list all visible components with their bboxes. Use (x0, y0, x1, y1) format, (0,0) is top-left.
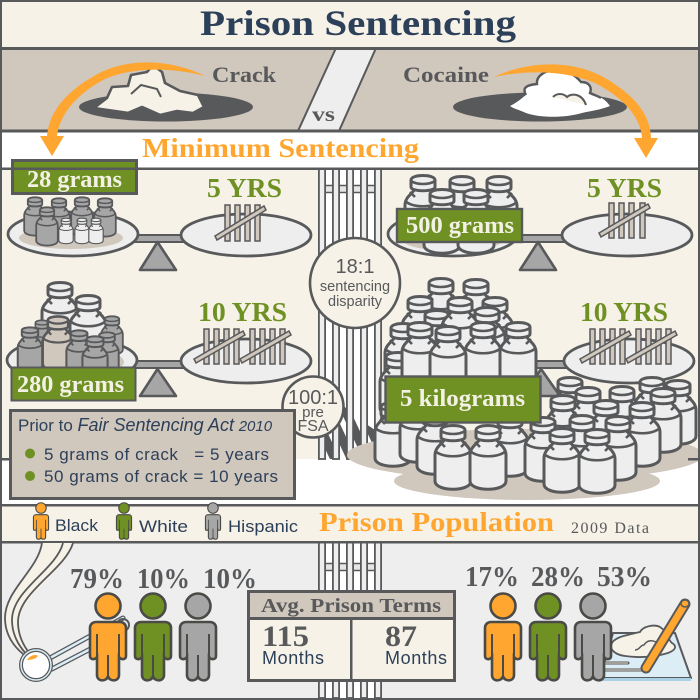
percent: 10: 10% (137, 564, 190, 595)
panel: average prison terms (248, 592, 454, 680)
legend: hispanic: Hispanic (228, 517, 299, 536)
header: Avg. Prison Terms (261, 595, 441, 617)
heading: prison population: Prison Population (319, 507, 554, 537)
label: 500 grams (397, 209, 522, 242)
crack label: Crack (212, 62, 277, 87)
cocaine label: Cocaine (403, 62, 489, 87)
legend (33, 503, 299, 539)
label: 10 yrs: 10 YRS (198, 297, 287, 327)
pile shadow (347, 429, 700, 500)
vs label: vs (312, 104, 335, 126)
legend: hispanic (205, 503, 299, 539)
callout: 100:1 pre FSA: FSA (297, 418, 329, 435)
scale beam and base (130, 361, 190, 396)
icon: cocaine pile (453, 70, 627, 122)
panel: 5 years crack scale (8, 160, 311, 270)
scale beam and base (510, 235, 570, 270)
panel: cocaine population (465, 562, 652, 680)
icon: hispanic figure (575, 594, 611, 680)
bullet: 5 grams: 5 grams of crack = 5 years (44, 445, 269, 464)
callout: 100:1 pre FSA: 100:1 (288, 387, 338, 409)
icon: powder plate and straw (600, 600, 691, 681)
scale beam and base (524, 361, 580, 396)
scale beam and base (130, 235, 190, 270)
arrow: cocaine to minimum sentencing (494, 64, 658, 158)
arrow: crack to minimum sentencing (40, 62, 205, 156)
label: 5 kilograms (386, 376, 540, 422)
label: 500 grams: 500 grams (406, 213, 514, 239)
panel: 10 years cocaine scale (347, 278, 700, 500)
percent: 17: 17% (465, 562, 519, 593)
legend: black: Black (55, 516, 99, 535)
right dish with tally (181, 205, 311, 256)
label: 28 grams: 28 grams (27, 167, 122, 193)
bullet: 50 grams: 50 grams of crack = 10 years (44, 467, 278, 486)
header (248, 592, 454, 618)
right dish with tally (564, 329, 694, 383)
panel: crack versus cocaine (79, 48, 627, 131)
cocaine term (385, 620, 447, 668)
vs divider (298, 48, 376, 131)
percent: 53: 53% (597, 562, 652, 593)
crack term: 115 (262, 620, 309, 653)
label: 5 yrs: 5 YRS (207, 173, 282, 203)
panel: 10 years crack scale (7, 282, 311, 400)
crack term: Months (262, 648, 324, 668)
label: 280 grams (12, 368, 136, 400)
left dish with crack bottles (8, 197, 138, 256)
cocaine term: 87 (385, 620, 417, 653)
callout: 18:1 sentencing disparity: disparity (328, 294, 383, 310)
callout: 18:1 sentencing disparity: 18:1 (336, 256, 374, 278)
icon: black figure (485, 594, 521, 680)
label: 280 grams: 280 grams (17, 372, 124, 398)
data year note: 2009 Data (571, 520, 649, 537)
panel: crack population (70, 564, 257, 680)
panel: fair sentencing act note (10, 410, 294, 498)
legend: white: White (139, 517, 188, 536)
right dish with tally (181, 329, 311, 383)
legend: black (33, 503, 99, 539)
note heading: Prior to Fair Sentencing Act 2010 (18, 415, 273, 435)
callout: 100:1 pre FSA (282, 376, 344, 438)
legend: white (116, 503, 188, 539)
heading: minimum sentencing: Minimum Sentencing (142, 133, 420, 163)
label: 28 grams (12, 160, 136, 194)
icon: crack rock (79, 65, 253, 122)
label: 5 yrs: 5 YRS (587, 173, 662, 203)
prison bars centre column top (319, 169, 381, 459)
cocaine bottle pile (375, 278, 696, 493)
label: 5 kilograms: 5 kilograms (400, 386, 525, 412)
icon: crack pipe and smoke (5, 543, 129, 680)
percent: 10: 10% (203, 564, 257, 595)
callout: 18:1 sentencing disparity: sentencing (320, 279, 390, 295)
icon: black figure (90, 594, 126, 680)
percent: 79: 79% (70, 564, 124, 595)
right dish with tally (562, 203, 692, 256)
left dish with crack bottles (7, 282, 137, 382)
crack term (262, 620, 324, 668)
cocaine term: Months (385, 648, 447, 668)
callout: 100:1 pre FSA: pre (302, 404, 324, 421)
title: Prison Sentencing (200, 3, 516, 43)
label: 10 yrs: 10 YRS (580, 297, 668, 327)
panel: 5 years cocaine scale (388, 173, 692, 270)
icon: hispanic figure (180, 594, 216, 680)
icon: white figure (530, 594, 566, 680)
percent: 28: 28% (531, 562, 585, 593)
prison bars centre column bottom (319, 542, 381, 698)
left dish with cocaine bottles (388, 176, 518, 256)
callout: 18:1 sentencing disparity (310, 238, 400, 328)
icon: white figure (135, 594, 171, 680)
